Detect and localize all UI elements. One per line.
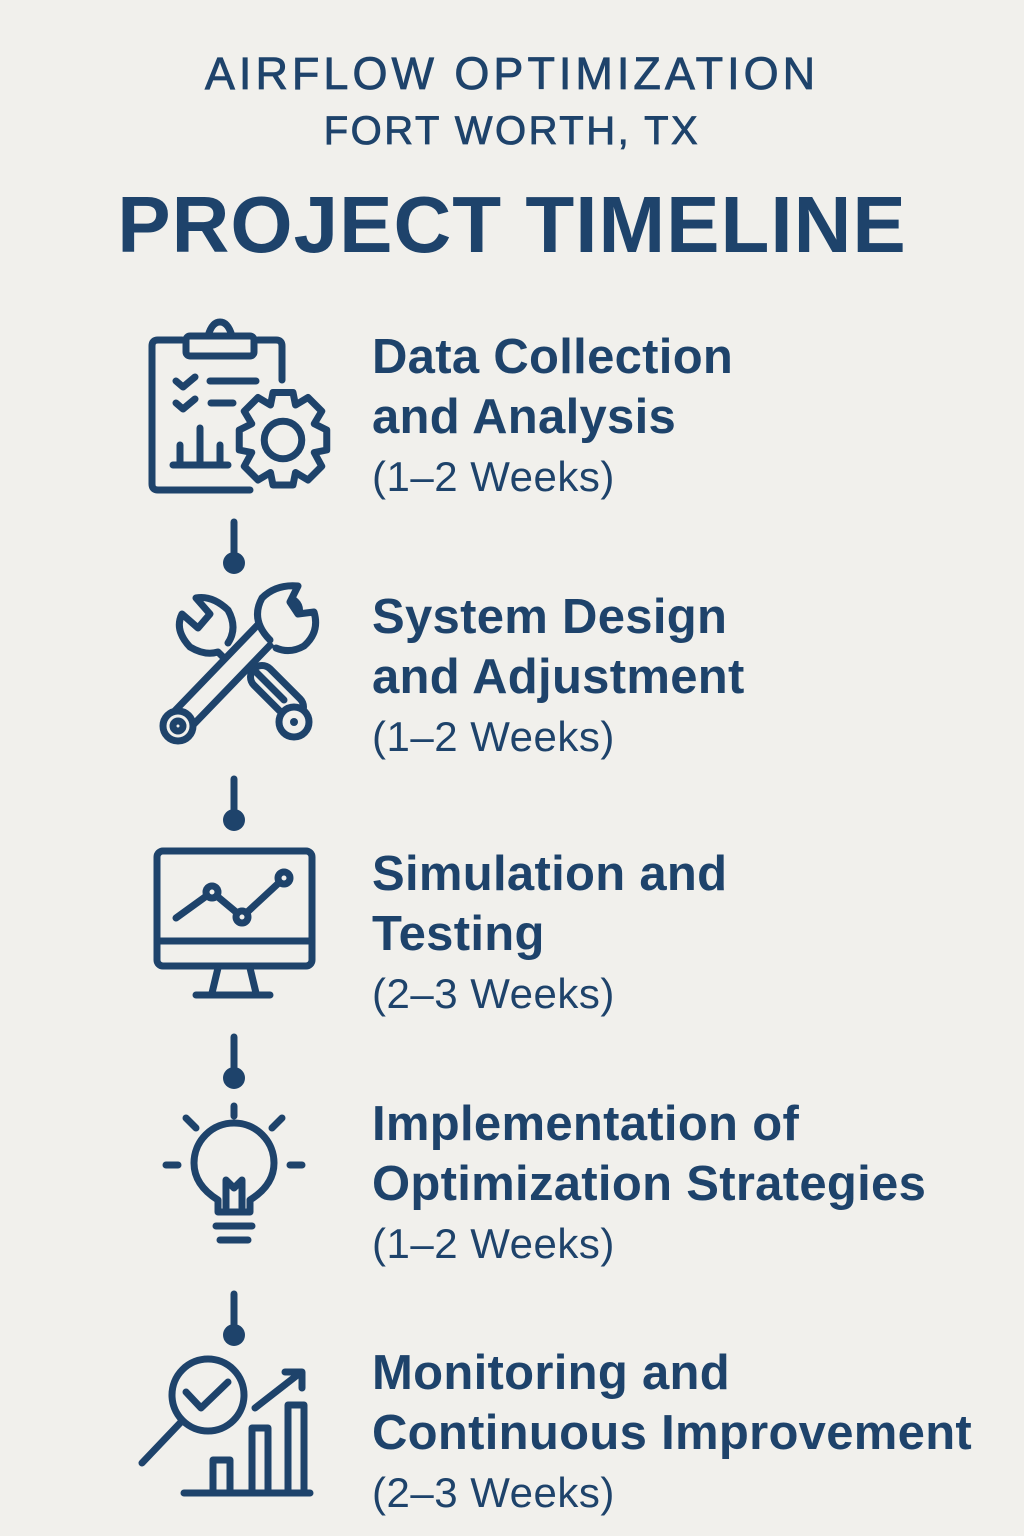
- step 5 text: Monitoring and: [372, 1346, 730, 1400]
- icon: crossed wrenches: [163, 586, 316, 741]
- step 4 text: (1–2 Weeks): [372, 1220, 615, 1267]
- icon: magnifier with growth chart: [142, 1359, 310, 1493]
- icon: clipboard with gear: [152, 322, 327, 490]
- step 2 text: (1–2 Weeks): [372, 713, 615, 760]
- step 4 text: Optimization Strategies: [372, 1157, 926, 1211]
- step 3 text: Simulation and: [372, 847, 727, 901]
- step 2 text: [372, 590, 745, 760]
- icon: light bulb: [166, 1106, 302, 1240]
- step 4 text: Implementation of: [372, 1097, 799, 1151]
- step 1 text: (1–2 Weeks): [372, 453, 615, 500]
- subtitle: FORT WORTH, TX: [324, 109, 700, 153]
- step 3 text: (2–3 Weeks): [372, 970, 615, 1017]
- step 2 text: System Design: [372, 590, 727, 644]
- connector 2: [223, 779, 245, 831]
- step 3 text: Testing: [372, 907, 545, 961]
- step 1 text: and Analysis: [372, 390, 676, 444]
- step 5 text: (2–3 Weeks): [372, 1469, 615, 1516]
- title: AIRFLOW OPTIMIZATION: [205, 48, 819, 99]
- step 5 text: Continuous Improvement: [372, 1406, 972, 1460]
- icon: monitor with chart: [157, 851, 312, 995]
- step 3 text: [372, 847, 727, 1017]
- connector 1: [223, 522, 245, 574]
- connector 4: [223, 1294, 245, 1346]
- step 5 text: [372, 1346, 972, 1516]
- step 1 text: [372, 330, 733, 500]
- step 1 text: Data Collection: [372, 330, 733, 384]
- step 2 text: and Adjustment: [372, 650, 745, 704]
- connector 3: [223, 1037, 245, 1089]
- step 4 text: [372, 1097, 926, 1267]
- heading: PROJECT TIMELINE: [117, 180, 907, 269]
